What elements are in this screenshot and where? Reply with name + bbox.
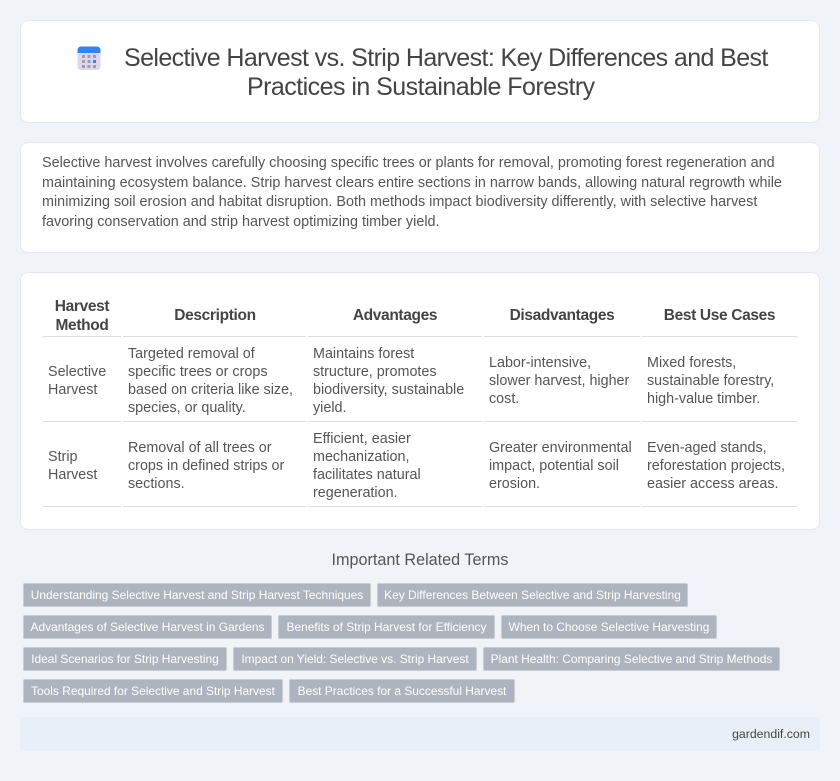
tag: Key Differences Between Selective and Strip Harvesting <box>384 588 681 602</box>
row: Strip Harvest description: crops in defined strips or <box>128 458 284 474</box>
intro card <box>20 142 820 253</box>
row: Selective Harvest advantages: biodiversity, sustainable <box>313 382 464 398</box>
tag: Tools Required for Selective and Strip Harvest <box>31 684 275 698</box>
row: Strip Harvest best use cases: Even-aged stands, <box>647 440 767 456</box>
row: Selective Harvest description <box>128 346 293 416</box>
tag <box>289 679 515 703</box>
row: Selective Harvest description: specific trees or crops <box>128 364 268 380</box>
tag: Ideal Scenarios for Strip Harvesting <box>31 652 219 666</box>
footer source text: gardendif.com <box>732 727 810 741</box>
row: Strip Harvest advantages: Efficient, easier <box>313 431 411 447</box>
tag <box>233 647 477 671</box>
tag <box>377 583 688 607</box>
tag: Plant Health: Comparing Selective and Strip Methods <box>491 652 772 666</box>
row: Strip Harvest advantages <box>313 431 421 501</box>
tag <box>23 679 283 703</box>
row: Strip Harvest disadvantages: impact, potential soil <box>489 458 619 474</box>
row: Selective Harvest method <box>48 364 106 398</box>
row: Selective Harvest advantages: Maintains forest <box>313 346 414 362</box>
row: Selective Harvest disadvantages: cost. <box>489 391 519 407</box>
header: Best Use Cases: Best Use Cases <box>664 307 775 324</box>
header: Harvest Method: Harvest <box>55 298 109 315</box>
row: Strip Harvest description <box>128 440 284 492</box>
row: Selective Harvest best use cases: Mixed forests, <box>647 355 736 371</box>
row: Selective Harvest best use cases <box>647 355 774 407</box>
tag <box>278 615 495 639</box>
row: Selective Harvest disadvantages: Labor-intensive, <box>489 355 591 371</box>
header card <box>20 20 820 123</box>
tag: Benefits of Strip Harvest for Efficiency <box>287 620 486 634</box>
table card <box>20 272 820 530</box>
header: Harvest Method <box>55 298 110 334</box>
row: Selective Harvest method: Selective <box>48 364 106 380</box>
row: Strip Harvest method: Strip <box>48 449 78 465</box>
tag: Impact on Yield: Selective vs. Strip Harvest <box>241 652 469 666</box>
tag: When to Choose Selective Harvesting <box>509 620 709 634</box>
row: Selective Harvest advantages: structure, promotes <box>313 364 437 380</box>
related term tags <box>23 583 780 703</box>
row: Strip Harvest disadvantages: Greater environmental <box>489 440 632 456</box>
intro text: favoring conservation and strip harvest optimizing timber yield. <box>42 214 440 230</box>
row: Strip Harvest best use cases <box>647 440 785 492</box>
tag <box>23 615 272 639</box>
tag <box>483 647 780 671</box>
row: Selective Harvest best use cases: sustainable forestry, <box>647 373 774 389</box>
icon: calendar <box>78 46 100 70</box>
row: Strip Harvest description: sections. <box>128 476 185 492</box>
row: Strip Harvest best use cases: easier access areas. <box>647 476 779 492</box>
intro text: maintaining ecosystem balance. Strip harvest clears entire sections in narrow bands, allowing natural regrowth while <box>42 174 782 190</box>
title: Practices in Sustainable Forestry <box>247 73 595 101</box>
row: Strip Harvest advantages: regeneration. <box>313 485 398 501</box>
row: Selective Harvest advantages: yield. <box>313 400 346 416</box>
row: Strip Harvest advantages: mechanization, <box>313 449 409 465</box>
footer bar <box>20 717 820 751</box>
tag: Best Practices for a Successful Harvest <box>298 684 506 698</box>
header: Harvest Method: Method <box>56 317 108 334</box>
row: Selective Harvest method: Harvest <box>48 382 97 398</box>
row: Strip Harvest method: Harvest <box>48 467 97 483</box>
row: Strip Harvest best use cases: reforestation projects, <box>647 458 785 474</box>
row: Selective Harvest disadvantages: slower harvest, higher <box>489 373 629 389</box>
row: Selective Harvest disadvantages <box>489 355 630 407</box>
intro text <box>42 155 782 230</box>
row: Strip Harvest disadvantages <box>489 440 632 492</box>
row: Selective Harvest description: species, or quality. <box>128 400 246 416</box>
row: Strip Harvest method <box>48 449 98 483</box>
title <box>124 44 768 101</box>
header: Description: Description <box>174 307 256 324</box>
row: Selective Harvest description: Targeted removal of <box>128 346 255 362</box>
header: Disadvantages: Disadvantages <box>510 307 614 324</box>
tag: Advantages of Selective Harvest in Gardens <box>31 620 264 634</box>
row: Selective Harvest best use cases: high-value timber. <box>647 391 760 407</box>
title: Selective Harvest vs. Strip Harvest: Key Differences and Best <box>124 44 768 72</box>
tag <box>23 583 371 607</box>
tag <box>501 615 717 639</box>
row: Strip Harvest advantages: facilitates natural <box>313 467 421 483</box>
tag: Understanding Selective Harvest and Strip Harvest Techniques <box>31 588 363 602</box>
heading: Important Related Terms: Important Related Terms <box>332 551 508 569</box>
comparison table <box>43 298 797 507</box>
row: Selective Harvest description: based on criteria like size, <box>128 382 293 398</box>
header: Advantages: Advantages <box>353 307 437 324</box>
intro text: Selective harvest involves carefully choosing specific trees or plants for removal, promoting forest regeneration and <box>42 155 775 171</box>
row: Strip Harvest disadvantages: erosion. <box>489 476 540 492</box>
row: Selective Harvest advantages <box>313 346 464 416</box>
intro text: minimizing soil erosion and habitat disruption. Both methods impact biodiversity differently, with selective harvest <box>42 194 757 210</box>
tag <box>23 647 227 671</box>
row: Strip Harvest description: Removal of all trees or <box>128 440 272 456</box>
